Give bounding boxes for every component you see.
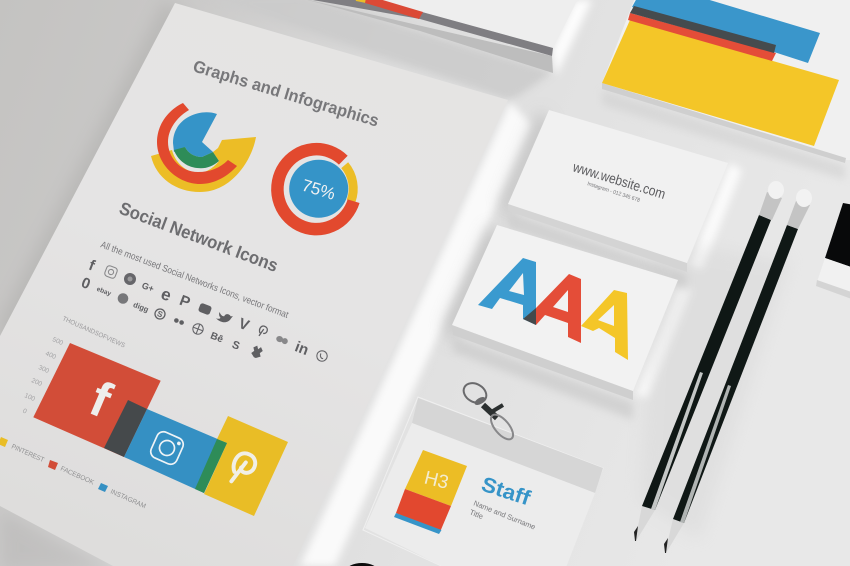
icon row: social network glyphs top <box>86 257 329 363</box>
name text: Name and Surname <box>472 499 537 532</box>
chart axis labels: 200 <box>30 377 43 388</box>
staff label: Staff <box>478 473 534 511</box>
pencil: right <box>664 189 812 553</box>
legend: facebook <box>48 460 95 487</box>
icon row: social network glyphs bottom: Bē <box>209 331 225 346</box>
icon row: social network glyphs bottom <box>79 274 264 359</box>
icon row: social network glyphs top: e <box>158 284 174 305</box>
legend <box>0 437 147 510</box>
icon row: social network glyphs bottom: digg <box>132 300 150 314</box>
legend: pinterest: PINTEREST <box>10 443 45 464</box>
letter: red A <box>536 274 581 343</box>
chart label: thousands of views: THOUSANDSOFVIEWS <box>61 315 127 350</box>
icon: facebook: f <box>82 370 120 429</box>
logo: blue block <box>394 513 442 534</box>
contact line: Instagram - 012 345 678 <box>586 181 641 204</box>
yellow segment <box>151 137 256 192</box>
icon: lanyard clip <box>460 379 517 443</box>
yellow block <box>602 20 839 146</box>
blue block <box>632 0 820 63</box>
pencil: left <box>634 181 784 541</box>
heading: graphs and infographics: Graphs and Infographics <box>191 57 381 131</box>
bar chart: social network views <box>33 343 288 516</box>
icon row: social network glyphs bottom: ebay <box>96 286 112 298</box>
icon row: social network glyphs top: V <box>236 315 251 334</box>
overlap green <box>195 439 227 493</box>
chart: multi-colour radial chart <box>151 103 256 192</box>
icon row: social network glyphs bottom: S <box>230 339 241 353</box>
panel: website business card <box>508 110 728 272</box>
panel: staff id badge <box>363 397 603 566</box>
description text: All the most used Social Networks Icons, vector format <box>99 240 290 321</box>
chart axis labels: 300 <box>37 364 50 375</box>
yellow edge <box>355 0 366 3</box>
percentage: 75% <box>300 176 338 204</box>
red edge <box>365 0 423 19</box>
panel: top right letterhead stack <box>602 0 850 163</box>
logo text: H3 <box>422 468 451 494</box>
letter: yellow A <box>581 290 628 360</box>
legend: pinterest <box>0 437 45 464</box>
badge paper <box>365 423 595 566</box>
letter: blue A <box>478 258 536 325</box>
top sheet <box>330 0 580 48</box>
facebook bar <box>33 343 161 457</box>
chart axis labels <box>22 336 64 416</box>
overlap dark <box>104 400 147 457</box>
panel: main infographic sheet <box>0 3 508 566</box>
chart axis labels: 500 <box>51 336 64 347</box>
panel: top centre letterhead stack <box>296 0 580 73</box>
red ring <box>277 149 354 229</box>
chart: 75% donut <box>277 149 354 229</box>
legend: instagram: INSTAGRAM <box>109 488 147 510</box>
sleeve top strip <box>412 398 603 493</box>
instagram bar <box>124 409 227 493</box>
yellow ring <box>345 165 353 201</box>
pinterest bar <box>204 416 288 516</box>
panel: AAA business card <box>452 225 678 400</box>
stack side <box>300 0 553 73</box>
title text: Title <box>468 508 485 521</box>
chart axis labels: 400 <box>44 350 57 361</box>
icon row: social network glyphs top: in <box>292 338 311 359</box>
blue segment <box>173 112 217 157</box>
blue disc <box>289 160 348 218</box>
red stripe <box>628 13 776 61</box>
chart axis labels: 100 <box>23 392 36 403</box>
icon row: social network glyphs top: f <box>86 257 98 275</box>
green segment <box>174 147 219 168</box>
icon row: social network glyphs top: G+ <box>140 280 155 294</box>
icon: pinterest <box>227 450 258 488</box>
dark stripe <box>630 6 776 53</box>
panel: eraser block <box>816 203 850 302</box>
icon row: social network glyphs top: P <box>177 292 192 311</box>
bottom black object <box>346 563 378 566</box>
website url: www.website.com <box>570 158 668 202</box>
icon: instagram <box>149 430 185 466</box>
grey edge band <box>296 0 553 56</box>
logo: red block <box>396 489 451 532</box>
icon row: social network glyphs bottom: S <box>156 309 165 320</box>
legend: instagram <box>98 483 147 510</box>
red arc <box>157 103 237 184</box>
chart axis labels: 0 <box>22 408 28 416</box>
heading: social network icons: Social Network Icons <box>117 198 281 276</box>
icon row: social network glyphs bottom: 0 <box>79 274 93 293</box>
logo: yellow block <box>405 450 467 506</box>
overlap: dark A foot <box>523 308 536 325</box>
plastic sleeve <box>363 397 603 566</box>
legend: facebook: FACEBOOK <box>59 465 95 487</box>
